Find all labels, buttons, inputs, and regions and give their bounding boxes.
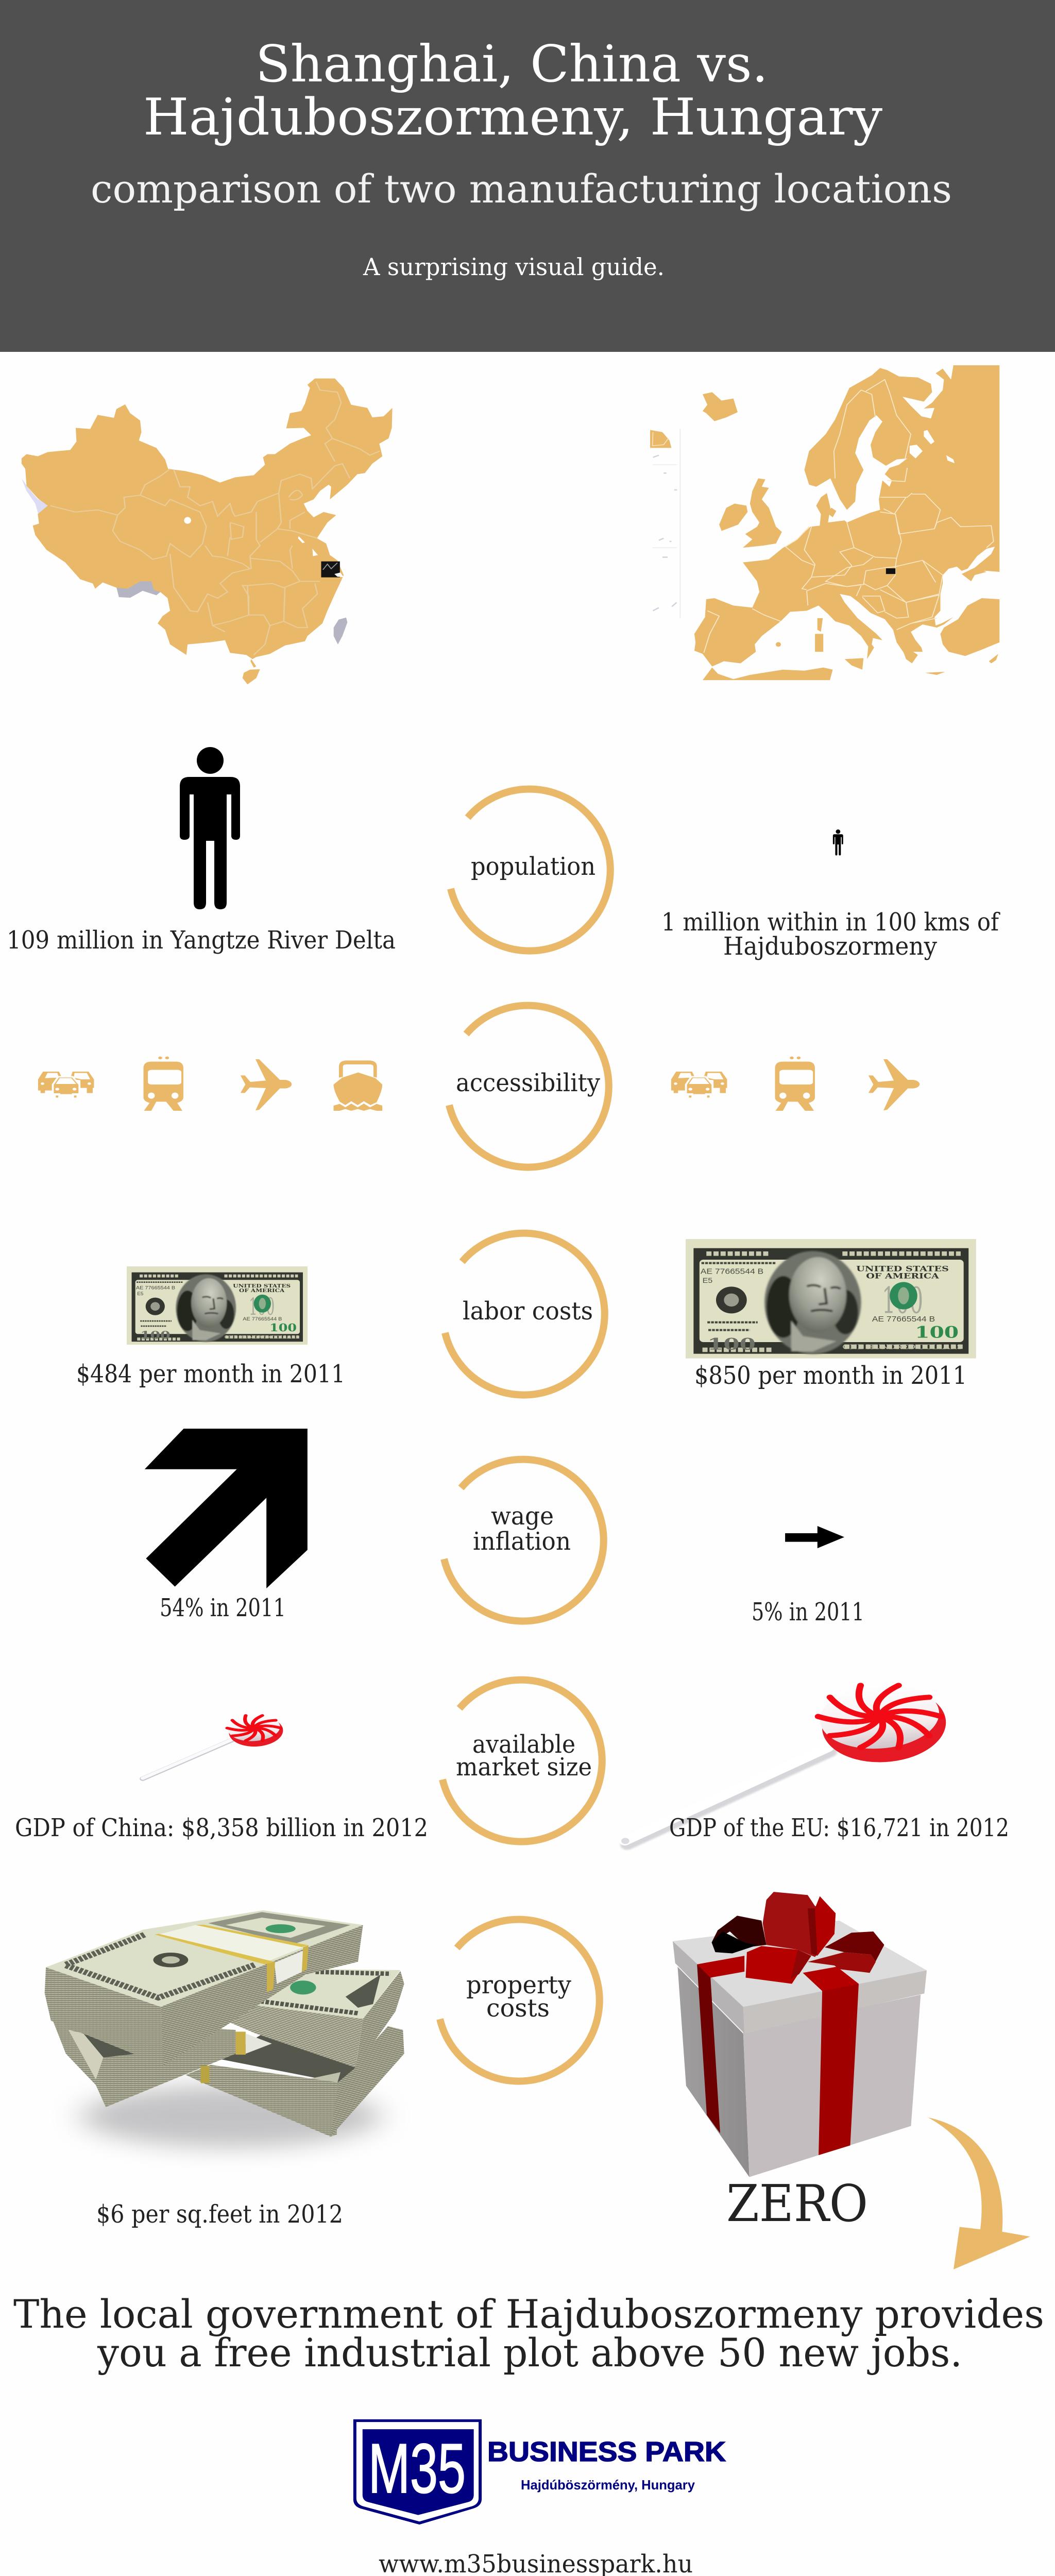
- image: large dollar bill: AE 77665544 B: [701, 1268, 763, 1276]
- business park wordmark: BUSINESS PARK: [487, 2436, 726, 2467]
- shield label: M35: [368, 2429, 466, 2507]
- icon: plane right: [869, 1059, 920, 1110]
- row: accessibility: [38, 1006, 920, 1167]
- image: large dollar bill: AE 77665544 B: [872, 1315, 935, 1324]
- image: large dollar bill: [686, 1239, 976, 1359]
- map: Europe: [650, 365, 999, 680]
- icon: large arrow: [145, 1429, 308, 1588]
- category ring: [443, 1680, 602, 1842]
- category label: inflation: [473, 1527, 571, 1556]
- category ring: [445, 1233, 605, 1395]
- category ring: [451, 789, 610, 951]
- icon: train left: [143, 1057, 183, 1111]
- shield: [353, 2419, 482, 2524]
- text: Hungary population: [661, 908, 1000, 961]
- row: property costs: [45, 1892, 1030, 2269]
- icon: ship: [334, 1060, 382, 1111]
- text: China population: 109 million in Yangtze River Delta: [7, 926, 396, 955]
- category label: labor costs: [463, 1297, 593, 1326]
- text: China GDP: GDP of China: $8,358 billion in 2012: [15, 1814, 428, 1842]
- image: large dollar bill: 100: [707, 1335, 756, 1353]
- icon: cars left: [38, 1072, 94, 1098]
- text: China property cost: $6 per sq.feet in 2012: [96, 2200, 343, 2229]
- Hajduboszormeny marker: [886, 568, 895, 574]
- text: Hungary wage inflation: 5% in 2011: [752, 1598, 864, 1626]
- row: available market size: [15, 1679, 1009, 1845]
- arrow: curved: [928, 2117, 1030, 2269]
- text: Hungary population: Hajduboszormeny: [723, 932, 937, 961]
- text: Hungary labor cost: $850 per month in 2011: [694, 1361, 967, 1390]
- image: large dollar bill: UNITED STATES: [856, 1264, 949, 1273]
- image: small dollar bill: ONE HUNDRED DOLLARS: [224, 1335, 299, 1340]
- closing statement: [13, 2291, 1044, 2376]
- icon: small person: [833, 829, 843, 855]
- title: Shanghai, China vs.: [256, 35, 768, 94]
- image: small dollar bill: E5: [137, 1291, 144, 1297]
- category label: wage: [491, 1502, 554, 1531]
- image: large dollar bill: E5: [703, 1277, 712, 1285]
- row: population: [7, 747, 1000, 961]
- row: wage inflation: [145, 1429, 864, 1626]
- category label: [473, 1502, 571, 1556]
- text: ZERO: ZERO: [726, 2175, 868, 2233]
- closing statement: The local government of Hajduboszormeny provides: [13, 2291, 1044, 2337]
- icon: train right: [775, 1057, 815, 1111]
- title: [143, 35, 883, 147]
- icon: large lollipop: [621, 1679, 952, 1845]
- category ring: [440, 1920, 600, 2081]
- text: Hungary population: 1 million within in 100 kms of: [661, 908, 1000, 937]
- image: gift box: [673, 1892, 927, 2177]
- text: China labor cost: $484 per month in 2011: [76, 1360, 345, 1388]
- tagline: A surprising visual guide.: [363, 253, 665, 281]
- image: small dollar bill: 100: [269, 1321, 297, 1334]
- icon: small arrow: [785, 1526, 844, 1548]
- text: China wage inflation: 54% in 2011: [160, 1594, 286, 1622]
- location: Hajdúböszörmény, Hungary: [521, 2477, 695, 2493]
- image: large dollar bill: ONE HUNDRED DOLLARS: [842, 1344, 963, 1351]
- category ring: [449, 1006, 609, 1167]
- category label: [456, 1730, 592, 1782]
- category label: costs: [486, 1994, 550, 2023]
- image: small dollar bill: OF AMERICA: [239, 1288, 285, 1294]
- bow: [711, 1916, 767, 1947]
- category ring: [444, 1460, 604, 1621]
- image: small dollar bill: AE 77665544 B: [243, 1316, 282, 1322]
- closing statement: you a free industrial plot above 50 new jobs.: [97, 2330, 962, 2376]
- category label: [466, 1971, 571, 2023]
- image: small dollar bill: UNITED STATES: [233, 1283, 291, 1289]
- image: large dollar bill: 100: [915, 1323, 959, 1342]
- subtitle: comparison of two manufacturing locations: [91, 166, 952, 212]
- Shanghai marker: [321, 562, 344, 578]
- category label: accessibility: [456, 1069, 600, 1097]
- islands and neighbouring land: [703, 392, 999, 680]
- header banner: [0, 0, 1055, 352]
- image: stacks of money: [45, 1910, 404, 2147]
- image: small dollar bill: 100: [140, 1329, 171, 1341]
- category label: property: [466, 1971, 571, 1999]
- category label: available: [472, 1730, 575, 1759]
- image: small dollar bill: AE 77665544 B: [136, 1285, 175, 1291]
- image: large dollar bill: OF AMERICA: [866, 1272, 939, 1280]
- title: Hajduboszormeny, Hungary: [143, 88, 883, 147]
- category label: market size: [456, 1753, 592, 1782]
- image: small dollar bill: [127, 1266, 308, 1345]
- category label: population: [471, 852, 595, 881]
- icon: large person: [180, 747, 240, 909]
- icon: plane left: [241, 1059, 292, 1110]
- icon: small lollipop: [143, 1713, 286, 1779]
- image: large dollar bill: 100: [882, 1279, 923, 1321]
- logo: M35 Business Park: [353, 2419, 726, 2524]
- row: labor costs: [76, 1233, 976, 1395]
- image: small dollar bill: 100: [249, 1293, 275, 1321]
- icon: cars right: [671, 1072, 727, 1098]
- inset panels: [650, 429, 680, 618]
- map: China: [22, 379, 393, 684]
